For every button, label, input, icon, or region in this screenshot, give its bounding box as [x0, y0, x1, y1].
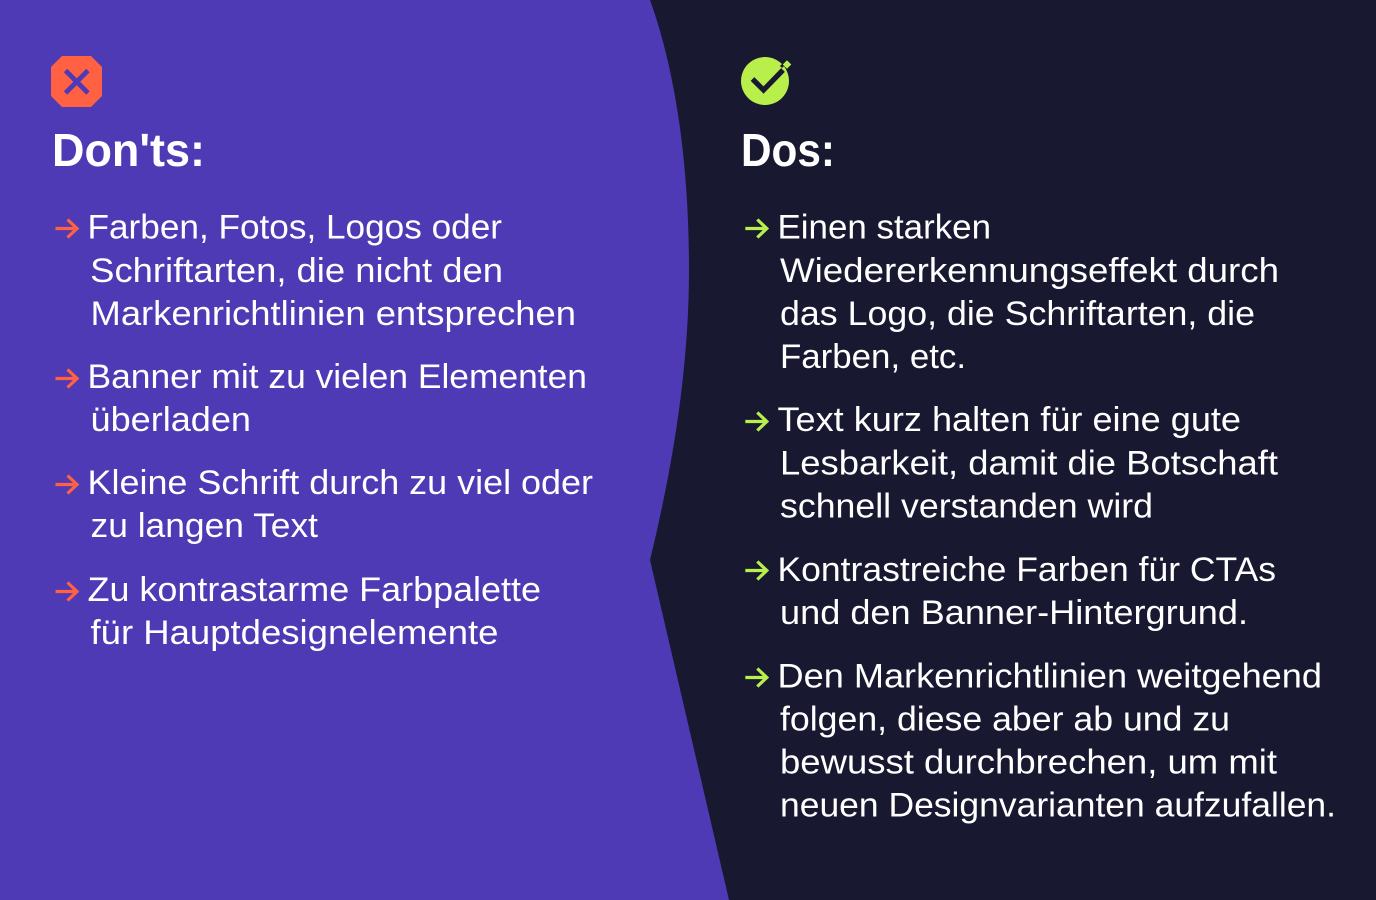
icon: red octagon with cross — [51, 56, 102, 107]
list item: Banner: Banner mit zu vielen Elementen — [88, 358, 587, 396]
list item: Kontrastreiche: Kontrastreiche Farben für CTAs — [778, 551, 1276, 589]
list item: Text kurz: schnell verstanden wird — [780, 487, 1153, 525]
list item: Einen starken — [745, 208, 1279, 376]
panel: dos content — [741, 57, 1336, 824]
list item: Text kurz: Lesbarkeit, damit die Botschaft — [780, 444, 1279, 482]
heading: Dos: Dos: — [741, 124, 835, 176]
list item: Farbpalette: für Hauptdesignelemente — [90, 614, 498, 652]
panel: don'ts purple background — [0, 0, 729, 900]
list item: Banner — [56, 358, 587, 439]
panel: don'ts content — [51, 56, 593, 652]
list item: Banner: überladen — [90, 401, 251, 439]
list item: Farbpalette: Zu kontrastarme Farbpalette — [88, 571, 541, 609]
list item: Kontrastreiche — [745, 551, 1276, 632]
list item: Text kurz: Text kurz halten für eine gute — [778, 401, 1241, 439]
list item: Einen starken: Einen starken — [778, 208, 991, 246]
list item: Einen starken: das Logo, die Schriftarten, die — [780, 295, 1255, 333]
list item: Farben, Fotos: Markenrichtlinien entsprechen — [90, 295, 576, 333]
list item: Farben, Fotos: Schriftarten, die nicht den — [90, 252, 503, 290]
icon: green check circle — [741, 57, 791, 105]
list item: Kleine Schrift — [56, 464, 593, 545]
list item: Einen starken: Wiedererkennungseffekt durch — [780, 252, 1279, 290]
heading: Don'ts: Don'ts: — [52, 124, 205, 176]
list item: Den Markenrichtlinien: Den Markenrichtlinien weitgehend — [778, 658, 1322, 696]
list item: Den Markenrichtlinien: folgen, diese aber ab und zu — [780, 700, 1230, 738]
list item: Einen starken: Farben, etc. — [780, 338, 966, 376]
list item: Kleine Schrift: zu langen Text — [90, 507, 319, 545]
list item: Den Markenrichtlinien: bewusst durchbrechen, um mit — [780, 744, 1278, 782]
list item: Text kurz — [745, 401, 1279, 525]
list item: Farben, Fotos — [56, 208, 576, 333]
list item: Farbpalette — [56, 571, 541, 652]
list item: Den Markenrichtlinien — [745, 658, 1336, 824]
list item: Kontrastreiche: und den Banner-Hintergrund. — [780, 594, 1248, 632]
list item: Farben, Fotos: Farben, Fotos, Logos oder — [88, 208, 502, 246]
list item: Kleine Schrift: Kleine Schrift durch zu viel oder — [88, 464, 593, 502]
list item: Den Markenrichtlinien: neuen Designvarianten aufzufallen. — [780, 786, 1336, 824]
